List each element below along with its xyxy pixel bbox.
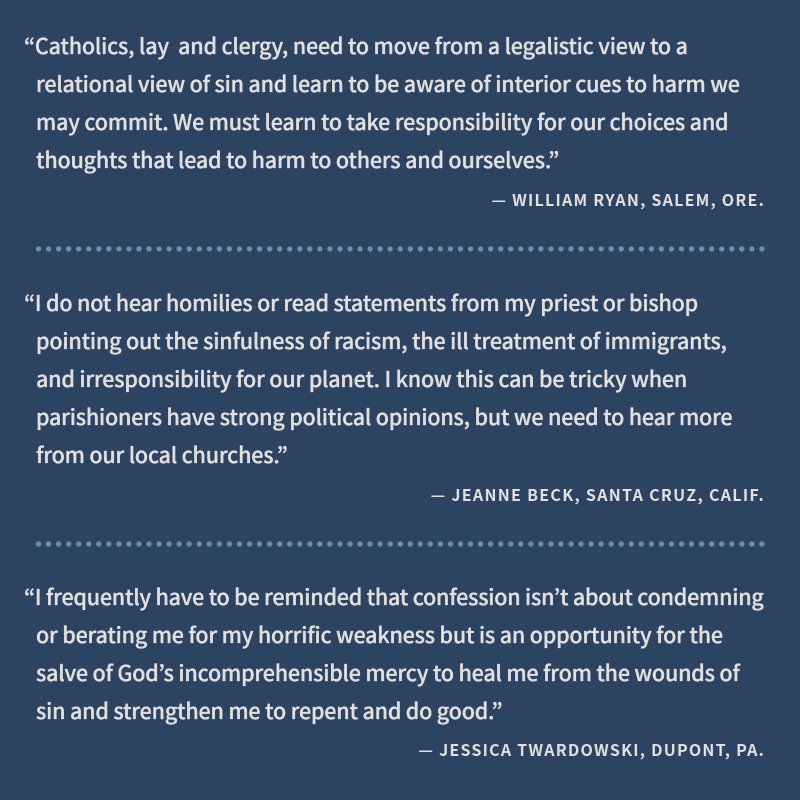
attribution: — JESSICA TWARDOWSKI, DUPONT, PA.: [418, 737, 765, 761]
quote text line 5: from our local churches.”: [36, 439, 288, 470]
quote text line 4: thoughts that lead to harm to others and ourselves.”: [36, 144, 559, 175]
quote text line 3: salve of God’s incomprehensible mercy to heal me from the wounds of: [36, 657, 740, 688]
dotted divider 1: [36, 246, 766, 252]
quote: William Ryan: [24, 30, 765, 211]
quote text line 1: “I frequently have to be reminded that confession isn’t about condemning: [24, 581, 764, 612]
quote text line 4: parishioners have strong political opinions, but we need to hear more: [36, 401, 732, 432]
attribution: — JEANNE BECK, SANTA CRUZ, CALIF.: [431, 482, 765, 506]
quote: Jeanne Beck: [24, 287, 765, 506]
quote text line 2: relational view of sin and learn to be aware of interior cues to harm we: [36, 68, 740, 99]
quote text line 2: pointing out the sinfulness of racism, the ill treatment of immigrants,: [36, 325, 727, 356]
attribution: — WILLIAM RYAN, SALEM, ORE.: [492, 187, 765, 211]
dotted divider 2: [36, 541, 766, 547]
quote text line 4: sin and strengthen me to repent and do good.”: [36, 695, 502, 726]
quote text line 2: or berating me for my horrific weakness but is an opportunity for the: [36, 619, 723, 650]
quote text line 1: “Catholics, lay and clergy, need to move from a legalistic view to a: [24, 30, 688, 61]
quote text line 1: “I do not hear homilies or read statements from my priest or bishop: [24, 287, 698, 318]
quote text line 3: and irresponsibility for our planet. I know this can be tricky when: [36, 363, 687, 394]
quote text line 3: may commit. We must learn to take responsibility for our choices and: [36, 106, 728, 137]
